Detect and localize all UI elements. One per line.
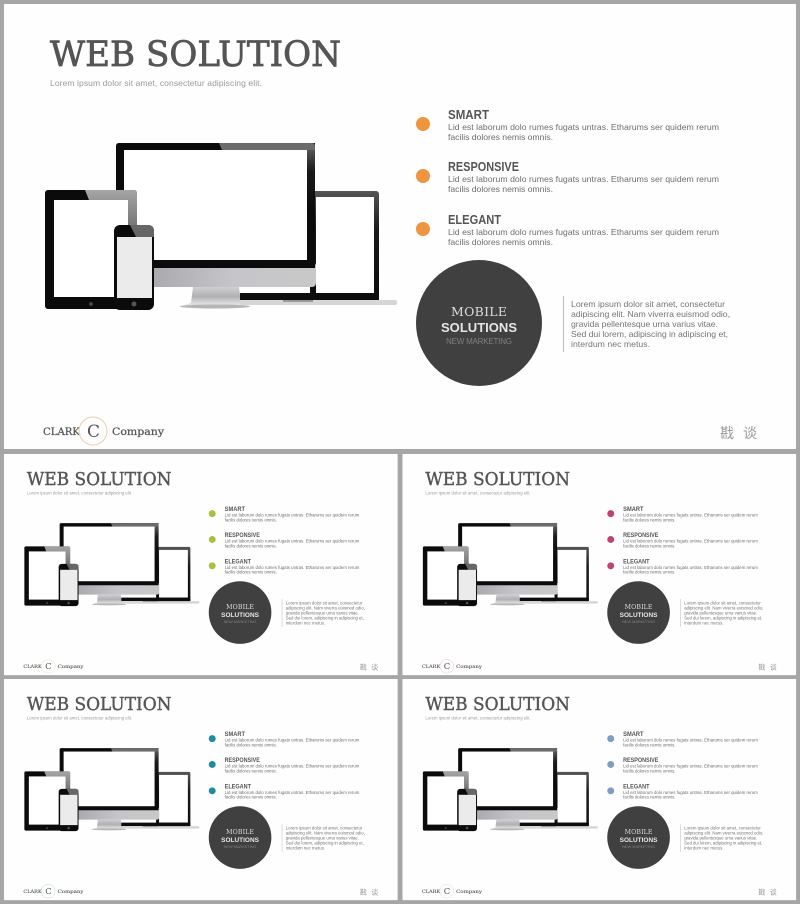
panel: small slide (rose): ELEGANT bbox=[623, 558, 650, 565]
panel: small slide (green): facilis dolores nemis omnis. bbox=[225, 570, 277, 575]
panel: small slide (rose): Lorem ipsum dolor sit amet, consectetur bbox=[684, 601, 761, 606]
panel: small slide (rose): WEB SOLUTION bbox=[425, 470, 570, 490]
panel: small slide (rose): NEW MARKETING bbox=[622, 619, 655, 624]
panel: small slide (green): NEW MARKETING bbox=[224, 619, 256, 624]
subtitle: Lorem ipsum dolor sit amet, consectetur adipiscing elit. bbox=[50, 78, 262, 88]
panel: small slide (green): Lid est laborum dolo rumes fugats untras. Etharums ser quidem rerum bbox=[225, 513, 360, 518]
feature: elegant bbox=[416, 213, 719, 247]
panel: small slide (teal): gravida pellentesque urna varius vitae. bbox=[286, 836, 359, 841]
panel: small slide (rose): interdum nec metus. bbox=[684, 620, 724, 625]
panel: small slide (teal): SOLUTIONS bbox=[221, 837, 260, 844]
panel: small slide (rose): Lid est laborum dolo rumes fugats untras. Etharums ser quidem rerum bbox=[623, 538, 758, 543]
panel: small slide (green): Sed dui lorem, adipiscing in adipiscing et, bbox=[286, 615, 364, 620]
panel: small slide (rose): RESPONSIVE bbox=[623, 532, 658, 539]
panel: small slide (rose): SMART bbox=[623, 506, 644, 513]
panel: small slide (teal): Lid est laborum dolo rumes fugats untras. Etharums ser quidem rerum bbox=[225, 790, 360, 795]
feature: smart: facilis dolores nemis omnis. bbox=[448, 132, 553, 142]
panel: small slide (green): SMART bbox=[225, 506, 245, 513]
title: WEB SOLUTION bbox=[50, 35, 341, 75]
device mockups bbox=[45, 143, 397, 310]
panel: small slide (blue-grey): adipiscing elit. Nam viverra euismod odio, bbox=[684, 831, 763, 836]
footer mark: 戡 谈 bbox=[720, 425, 757, 441]
panel: small slide (blue-grey): WEB SOLUTION bbox=[425, 695, 570, 715]
panel: small slide (teal): CLARK bbox=[23, 889, 42, 895]
panel: small slide (green): Lid est laborum dolo rumes fugats untras. Etharums ser quidem rerum bbox=[225, 538, 360, 543]
panel: small slide (blue-grey): SOLUTIONS bbox=[620, 837, 658, 844]
panel: small slide (blue-grey): facilis dolores nemis omnis. bbox=[623, 768, 675, 773]
feature: responsive: RESPONSIVE bbox=[448, 160, 519, 174]
panel: small slide (green): facilis dolores nemis omnis. bbox=[225, 518, 277, 523]
panel: small slide (rose): facilis dolores nemis omnis. bbox=[623, 518, 675, 523]
panel: small slide (rose): 戡 谈 bbox=[758, 663, 777, 672]
feature: responsive bbox=[416, 160, 719, 194]
panel: small slide (green): facilis dolores nemis omnis. bbox=[225, 543, 277, 548]
panel: small slide (blue-grey): Sed dui lorem, adipiscing in adipiscing et, bbox=[684, 840, 762, 845]
panel: small slide (green): Lid est laborum dolo rumes fugats untras. Etharums ser quidem rerum bbox=[225, 565, 360, 570]
feature: responsive: facilis dolores nemis omnis. bbox=[448, 184, 553, 194]
feature: smart bbox=[416, 108, 719, 142]
panel: small slide (teal): interdum nec metus. bbox=[286, 845, 325, 850]
badge: mobile solutions: NEW MARKETING bbox=[446, 337, 512, 346]
panel: small slide (blue-grey): Lid est laborum dolo rumes fugats untras. Etharums ser quidem rerum bbox=[623, 738, 758, 743]
panel: small slide (rose): gravida pellentesque urna varius vitae. bbox=[684, 611, 757, 616]
panel: small slide (rose): facilis dolores nemis omnis. bbox=[623, 543, 675, 548]
paragraph: gravida pellentesque urna varius vitae. bbox=[571, 319, 718, 329]
panel: small slide (green) bbox=[4, 454, 398, 675]
panel: small slide (teal): Lorem ipsum dolor sit amet, consectetur adipiscing elit. bbox=[27, 716, 132, 721]
panel: small slide (green): Company bbox=[58, 664, 84, 670]
paragraph bbox=[563, 296, 730, 352]
panel: small slide (blue-grey): CLARK bbox=[422, 889, 441, 895]
panel: small slide (teal): SMART bbox=[225, 731, 245, 738]
panel: small slide (teal): RESPONSIVE bbox=[225, 757, 260, 764]
panel: small slide (blue-grey): Company bbox=[456, 889, 482, 895]
panel: small slide (green): Lorem ipsum dolor sit amet, consectetur bbox=[286, 601, 363, 606]
panel: small slide (rose): SOLUTIONS bbox=[620, 612, 658, 619]
panel: small slide (rose): Lid est laborum dolo rumes fugats untras. Etharums ser quidem rerum bbox=[623, 565, 758, 570]
panel: small slide (rose): Lorem ipsum dolor sit amet, consectetur adipiscing elit. bbox=[425, 491, 531, 496]
panel: small slide (teal): NEW MARKETING bbox=[224, 844, 256, 849]
panel: small slide (rose): Lid est laborum dolo rumes fugats untras. Etharums ser quidem rerum bbox=[623, 513, 758, 518]
panel: small slide (green): CLARK bbox=[23, 664, 42, 670]
logo: Company bbox=[112, 427, 164, 438]
panel: small slide (blue-grey): ELEGANT bbox=[623, 783, 650, 790]
panel: small slide (teal): Sed dui lorem, adipiscing in adipiscing et, bbox=[286, 840, 364, 845]
panel: main slide (orange) bbox=[4, 4, 796, 449]
panel: small slide (teal): MOBILE bbox=[226, 829, 254, 836]
panel: small slide (teal): facilis dolores nemis omnis. bbox=[225, 768, 277, 773]
panel: small slide (blue-grey): Lorem ipsum dolor sit amet, consectetur adipiscing elit. bbox=[425, 716, 531, 721]
panel: small slide (blue-grey): interdum nec metus. bbox=[684, 845, 724, 850]
feature: smart: SMART bbox=[448, 108, 489, 122]
panel: small slide (rose): C bbox=[444, 661, 450, 671]
panel: small slide (rose): facilis dolores nemis omnis. bbox=[623, 570, 675, 575]
panel: small slide (green): RESPONSIVE bbox=[225, 532, 260, 539]
panel: small slide (teal): C bbox=[45, 886, 52, 896]
panel: small slide (green): WEB SOLUTION bbox=[27, 470, 171, 490]
panel: small slide (rose): Company bbox=[456, 664, 482, 670]
panel: small slide (blue-grey): RESPONSIVE bbox=[623, 757, 658, 764]
panel: small slide (blue-grey): facilis dolores nemis omnis. bbox=[623, 795, 675, 800]
paragraph: adipiscing elit. Nam viverra euismod odio, bbox=[571, 309, 730, 319]
logo bbox=[43, 417, 164, 445]
panel: small slide (teal): facilis dolores nemis omnis. bbox=[225, 795, 277, 800]
feature: elegant: facilis dolores nemis omnis. bbox=[448, 237, 553, 247]
panel: small slide (teal): Lid est laborum dolo rumes fugats untras. Etharums ser quidem rerum bbox=[225, 763, 360, 768]
badge: mobile solutions bbox=[416, 260, 542, 386]
panel: small slide (blue-grey): NEW MARKETING bbox=[622, 844, 655, 849]
badge: mobile solutions: MOBILE bbox=[451, 304, 507, 319]
panel: small slide (green): ELEGANT bbox=[225, 558, 251, 565]
panel: small slide (blue-grey): Lorem ipsum dolor sit amet, consectetur bbox=[684, 826, 761, 831]
panel: small slide (blue-grey): gravida pellentesque urna varius vitae. bbox=[684, 836, 757, 841]
badge: mobile solutions: SOLUTIONS bbox=[441, 320, 517, 335]
logo: CLARK bbox=[43, 427, 81, 438]
panel: small slide (green): adipiscing elit. Nam viverra euismod odio, bbox=[286, 606, 365, 611]
panel: small slide (blue-grey): 戡 谈 bbox=[758, 888, 777, 897]
panel: small slide (rose): MOBILE bbox=[625, 604, 653, 611]
panel: small slide (teal) bbox=[4, 679, 398, 900]
panel: small slide (rose) bbox=[402, 454, 796, 675]
panel: small slide (green): 戡 谈 bbox=[360, 663, 378, 672]
panel: small slide (blue-grey): C bbox=[444, 886, 450, 896]
panel: small slide (teal): Company bbox=[58, 889, 84, 895]
panel: small slide (green): MOBILE bbox=[226, 604, 254, 611]
panel: small slide (teal): Lid est laborum dolo rumes fugats untras. Etharums ser quidem rerum bbox=[225, 738, 360, 743]
panel: small slide (rose): CLARK bbox=[422, 664, 441, 670]
logo: C bbox=[87, 422, 100, 442]
panel: small slide (green): Lorem ipsum dolor sit amet, consectetur adipiscing elit. bbox=[27, 491, 132, 496]
panel: small slide (teal): adipiscing elit. Nam viverra euismod odio, bbox=[286, 831, 365, 836]
panel: small slide (blue-grey): MOBILE bbox=[625, 829, 653, 836]
panel: small slide (rose): adipiscing elit. Nam viverra euismod odio, bbox=[684, 606, 763, 611]
paragraph: Sed dui lorem, adipiscing in adipiscing et, bbox=[571, 329, 728, 339]
panel: small slide (blue-grey): facilis dolores nemis omnis. bbox=[623, 743, 675, 748]
panel: small slide (blue-grey) bbox=[402, 679, 796, 900]
panel: small slide (teal): ELEGANT bbox=[225, 783, 251, 790]
feature: smart: Lid est laborum dolo rumes fugats untras. Etharums ser quidem rerum bbox=[448, 122, 719, 132]
feature: elegant: Lid est laborum dolo rumes fugats untras. Etharums ser quidem rerum bbox=[448, 227, 719, 237]
panel: small slide (teal): Lorem ipsum dolor sit amet, consectetur bbox=[286, 826, 363, 831]
panel: small slide (green): SOLUTIONS bbox=[221, 612, 260, 619]
paragraph: Lorem ipsum dolor sit amet, consectetur bbox=[571, 299, 725, 309]
panel: small slide (teal): WEB SOLUTION bbox=[27, 695, 171, 715]
panel: small slide (teal): facilis dolores nemis omnis. bbox=[225, 743, 277, 748]
panel: small slide (green): gravida pellentesque urna varius vitae. bbox=[286, 611, 359, 616]
panel: small slide (green): interdum nec metus. bbox=[286, 620, 325, 625]
paragraph: interdum nec metus. bbox=[571, 339, 650, 349]
panel: small slide (teal): 戡 谈 bbox=[360, 888, 378, 897]
panel: small slide (blue-grey): Lid est laborum dolo rumes fugats untras. Etharums ser quidem rerum bbox=[623, 790, 758, 795]
panel: small slide (green): C bbox=[45, 661, 52, 671]
feature: responsive: Lid est laborum dolo rumes fugats untras. Etharums ser quidem rerum bbox=[448, 174, 719, 184]
panel: small slide (blue-grey): SMART bbox=[623, 731, 644, 738]
feature: elegant: ELEGANT bbox=[448, 213, 501, 227]
panel: small slide (rose): Sed dui lorem, adipiscing in adipiscing et, bbox=[684, 615, 762, 620]
panel: small slide (blue-grey): Lid est laborum dolo rumes fugats untras. Etharums ser quidem rerum bbox=[623, 763, 758, 768]
